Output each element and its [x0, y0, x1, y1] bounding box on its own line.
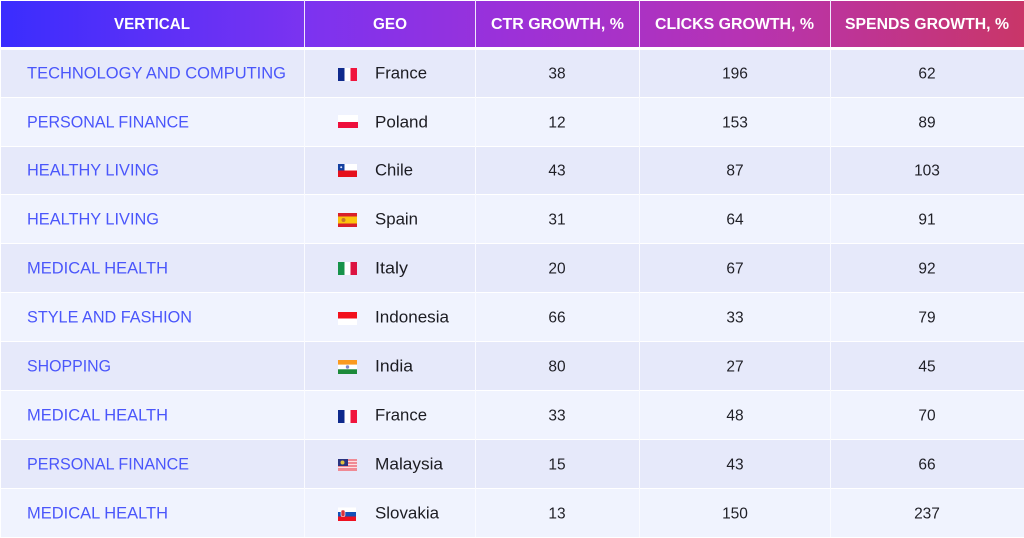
- row 10: Medical Health, Slovakia: MEDICAL HEALTH: [27, 504, 168, 522]
- row 8: Medical Health, France: [27, 406, 936, 425]
- icon: Poland flag: [338, 115, 358, 128]
- icon: India flag: [338, 360, 357, 374]
- header row: CTR GROWTH, %: [491, 16, 624, 33]
- row 5: Medical Health, Italy: 20: [548, 260, 566, 278]
- row 4: Healthy Living, Spain: HEALTHY LIVING: [27, 210, 159, 228]
- row 1: Technology and Computing, France: [27, 64, 936, 83]
- icon: Indonesia flag: [338, 312, 357, 325]
- row 7: Shopping, India: SHOPPING: [27, 357, 111, 375]
- icon: Malaysia flag: [338, 459, 357, 471]
- row 5: Medical Health, Italy: 67: [726, 260, 744, 278]
- icon: Spain flag: [338, 213, 357, 227]
- row 1: Technology and Computing, France: TECHNOLOGY AND COMPUTING: [27, 64, 286, 82]
- row 9: Personal Finance, Malaysia: [27, 455, 936, 474]
- row 2: Personal Finance, Poland: Poland: [375, 114, 428, 132]
- row 1: Technology and Computing, France: France: [375, 65, 427, 83]
- row 9: Personal Finance, Malaysia: PERSONAL FINANCE: [27, 455, 189, 473]
- row 8: Medical Health, France: France: [375, 407, 427, 425]
- row 8: Medical Health, France: MEDICAL HEALTH: [27, 406, 168, 424]
- row 6: Style and Fashion, Indonesia: 79: [918, 310, 936, 326]
- header row: GEO: [373, 16, 407, 33]
- row 5: Medical Health, Italy: Italy: [375, 260, 409, 278]
- icon: Slovakia flag: [338, 508, 356, 521]
- row 7: Shopping, India: 27: [726, 358, 744, 376]
- header row: CLICKS GROWTH, %: [655, 16, 814, 33]
- row 6: Style and Fashion, Indonesia: 66: [548, 310, 566, 326]
- row 4: Healthy Living, Spain: Spain: [375, 211, 418, 229]
- row 8: Medical Health, France: 70: [918, 408, 936, 424]
- row 9: Personal Finance, Malaysia: 15: [548, 456, 566, 474]
- row 8: Medical Health, France: 48: [726, 408, 744, 424]
- row 2: Personal Finance, Poland: PERSONAL FINANCE: [27, 113, 189, 131]
- row 3: Healthy Living, Chile: 43: [548, 162, 566, 180]
- row 2: Personal Finance, Poland: 89: [918, 114, 936, 132]
- row 9: Personal Finance, Malaysia: 66: [918, 456, 936, 474]
- row 6: Style and Fashion, Indonesia: 33: [726, 310, 744, 326]
- row 6: Style and Fashion, Indonesia: STYLE AND FASHION: [27, 308, 192, 326]
- row 10: Medical Health, Slovakia: Slovakia: [375, 505, 440, 523]
- row 3: Healthy Living, Chile: 103: [914, 162, 940, 180]
- row 3: Healthy Living, Chile: [27, 161, 940, 180]
- row 4: Healthy Living, Spain: 91: [918, 212, 936, 228]
- row 1: Technology and Computing, France: 196: [722, 66, 748, 82]
- row 10: Medical Health, Slovakia: 13: [548, 506, 566, 522]
- row 10: Medical Health, Slovakia: [27, 504, 940, 523]
- row 5: Medical Health, Italy: MEDICAL HEALTH: [27, 259, 168, 277]
- row 3: Healthy Living, Chile: HEALTHY LIVING: [27, 161, 159, 179]
- row 8: Medical Health, France: 33: [548, 408, 566, 424]
- row 6: Style and Fashion, Indonesia: [27, 308, 936, 327]
- row 2: Personal Finance, Poland: [27, 113, 936, 132]
- row 7: Shopping, India: 45: [918, 358, 936, 376]
- row 3: Healthy Living, Chile: 87: [726, 162, 744, 180]
- icon: France flag: [338, 410, 357, 423]
- row 1: Technology and Computing, France: 38: [548, 66, 566, 82]
- icon: France flag: [338, 68, 357, 81]
- row 2: Personal Finance, Poland: 12: [548, 114, 566, 132]
- header row: SPENDS GROWTH, %: [845, 16, 1009, 33]
- row 4: Healthy Living, Spain: [27, 210, 936, 229]
- row 7: Shopping, India: India: [375, 358, 414, 376]
- row 10: Medical Health, Slovakia: 237: [914, 506, 940, 522]
- row 2: Personal Finance, Poland: 153: [722, 114, 748, 132]
- header row: VERTICAL: [114, 16, 190, 33]
- row 1: Technology and Computing, France: 62: [918, 66, 936, 82]
- row 7: Shopping, India: 80: [548, 358, 566, 376]
- row 9: Personal Finance, Malaysia: Malaysia: [375, 456, 444, 474]
- header row: [1, 0, 1024, 47]
- icon: Chile flag: [338, 164, 357, 177]
- row 4: Healthy Living, Spain: 64: [726, 212, 744, 228]
- icon: Italy flag: [338, 262, 357, 275]
- row 9: Personal Finance, Malaysia: 43: [726, 456, 744, 474]
- row 10: Medical Health, Slovakia: 150: [722, 506, 748, 522]
- row 5: Medical Health, Italy: 92: [918, 260, 936, 278]
- row 5: Medical Health, Italy: [27, 259, 936, 278]
- row 4: Healthy Living, Spain: 31: [548, 212, 566, 228]
- row 3: Healthy Living, Chile: Chile: [375, 162, 413, 180]
- row 7: Shopping, India: [27, 357, 936, 376]
- row 6: Style and Fashion, Indonesia: Indonesia: [375, 309, 450, 327]
